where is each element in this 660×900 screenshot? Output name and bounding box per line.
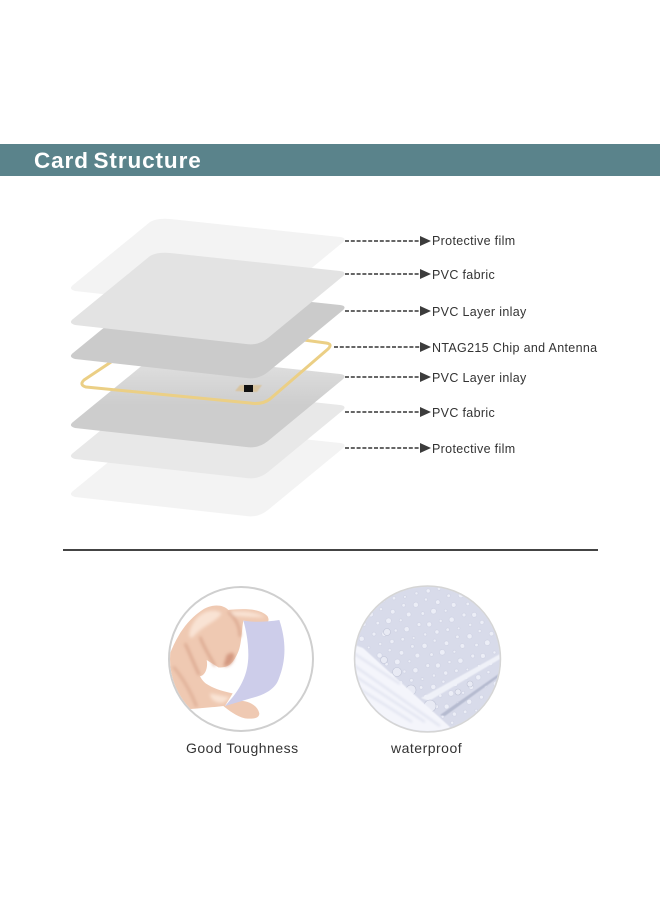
callout: PVC fabric	[345, 268, 495, 282]
callout: Protective film: Protective film	[432, 234, 515, 248]
large droplets	[380, 628, 473, 712]
callout: Protective film lower	[345, 442, 515, 456]
callout: PVC fabric lower: PVC fabric	[432, 406, 495, 420]
layer: top protective film	[71, 219, 345, 310]
callout: NTAG215 Chip and Antenna: NTAG215 Chip and Antenna	[432, 341, 597, 355]
callout: PVC Layer inlay	[345, 305, 527, 319]
photo: hand bending card	[167, 587, 313, 731]
exploded card layers	[71, 219, 345, 516]
infographic canvas	[0, 144, 660, 756]
sheet edge	[421, 654, 500, 701]
heading: Card Structure: Card Structure	[34, 148, 202, 173]
layer: lower PVC fabric	[71, 387, 345, 478]
callout: PVC Layer inlay lower: PVC Layer inlay	[432, 371, 527, 385]
layer: upper PVC inlay	[71, 287, 345, 378]
callout: NTAG215 Chip and Antenna	[334, 341, 597, 355]
caption: waterproof: waterproof	[390, 740, 462, 756]
layer: bottom protective film	[71, 425, 345, 516]
layer: upper PVC fabric	[71, 253, 345, 344]
caption: Good Toughness: Good Toughness	[186, 740, 299, 756]
callout: PVC fabric lower	[345, 406, 495, 420]
white stacked sheets	[356, 646, 450, 731]
NFC chip	[235, 385, 262, 392]
callout: PVC Layer inlay: PVC Layer inlay	[432, 305, 527, 319]
callout: Protective film	[345, 234, 515, 248]
header band	[0, 144, 660, 176]
hand highlights and shading	[173, 611, 265, 707]
callout: PVC Layer inlay lower	[345, 371, 527, 385]
antenna coil	[82, 323, 330, 404]
photo: water droplets on cards	[354, 585, 502, 733]
layer: lower PVC inlay	[71, 356, 345, 447]
callout: Protective film lower: Protective film	[432, 442, 515, 456]
callout: PVC fabric: PVC fabric	[432, 268, 495, 282]
